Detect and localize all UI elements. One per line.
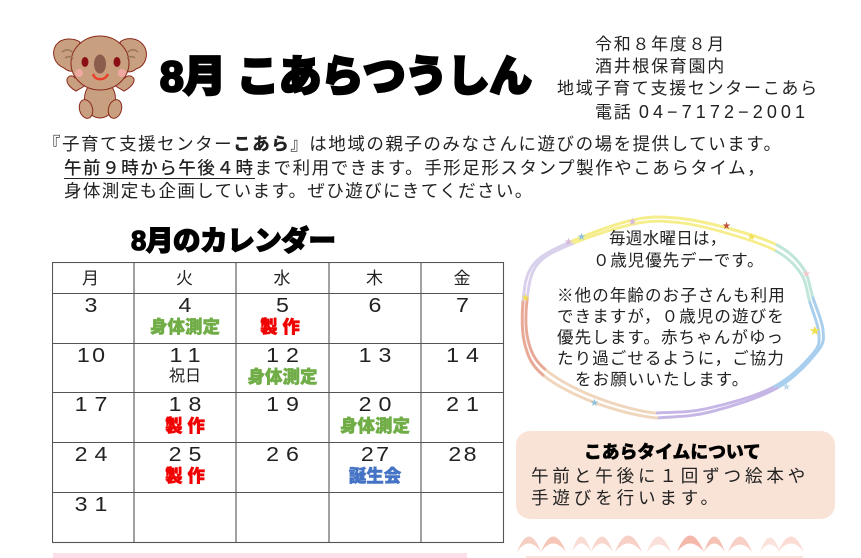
koala time body: 午前と午後に１回ずつ絵本や: [531, 466, 809, 486]
priority day notes: 優先します。赤ちゃんがゆっ: [557, 329, 784, 347]
priority day notes: たり過ごせるように，ご協力: [557, 350, 785, 368]
panel: zero-year-old priority day: ★: [577, 232, 586, 243]
panel: zero-year-old priority day: ★: [809, 324, 821, 339]
calendar dates and events: 20: [359, 394, 398, 416]
calendar dates and events: 7: [456, 295, 471, 317]
weekday headers: 金: [454, 269, 470, 288]
koala time body: 手遊びを行います。: [531, 488, 722, 508]
calendar dates and events: 12: [266, 345, 306, 367]
calendar dates and events: 10: [77, 345, 107, 367]
weekday headers: 木: [366, 269, 383, 288]
intro text: 身体測定も企画しています。ぜひ遊びにきてください。: [64, 181, 534, 201]
organisation details: 酒井根保育園内: [595, 57, 726, 76]
priority day notes: をお願いいたします。: [575, 371, 749, 389]
calendar dates and events: 24: [75, 444, 114, 466]
calendar dates and events: 27: [361, 444, 391, 466]
calendar dates and events: 25: [169, 444, 208, 466]
calendar dates and events: 祝日: [169, 368, 201, 385]
decorative pink band: [53, 553, 467, 558]
calendar dates and events: 製 作: [165, 416, 205, 436]
calendar dates and events: 31: [75, 494, 114, 516]
calendar dates and events: 13: [359, 345, 398, 367]
priority day heading: 毎週水曜日は，: [609, 230, 727, 248]
weekday headers: [82, 269, 470, 288]
calendar dates and events: 28: [448, 444, 479, 466]
calendar dates and events: 18: [169, 394, 208, 416]
organisation details: [557, 35, 819, 122]
calendar dates and events: 17: [75, 394, 114, 416]
weekday headers: 水: [274, 269, 290, 288]
weekday headers: 火: [176, 269, 193, 288]
priority day notes: [557, 286, 786, 389]
panel: zero-year-old priority day: [520, 216, 825, 420]
priority day notes: ※他の年齢のお子さんも利用: [557, 287, 786, 305]
calendar dates and events: 26: [266, 444, 306, 466]
calendar dates and events: 14: [446, 345, 486, 367]
panel: zero-year-old priority day: ★: [628, 217, 637, 228]
organisation details: 令和８年度８月: [595, 35, 726, 54]
panel: zero-year-old priority day: ★: [747, 232, 756, 243]
title: 8月 こあらつうしん: [160, 54, 531, 101]
priority day heading: [593, 230, 764, 270]
panel: zero-year-old priority day: ★: [782, 382, 791, 393]
panel: koala time: [516, 431, 835, 519]
calendar dates and events: 5: [276, 295, 291, 317]
panel: zero-year-old priority day: ★: [802, 269, 811, 280]
calendar dates and events: 21: [446, 394, 486, 416]
calendar dates and events: [75, 295, 486, 516]
weekday headers: 月: [82, 269, 99, 288]
calendar table: [52, 262, 504, 544]
panel: zero-year-old priority day: ★: [590, 398, 599, 409]
organisation details: 地域子育て支援センターこあら: [557, 79, 819, 98]
organisation details: 電話 04−7172−2001: [595, 102, 809, 122]
intro text: [43, 134, 783, 201]
priority day heading: ０歳児優先デーです。: [593, 252, 764, 270]
panel: zero-year-old priority day: ★: [564, 237, 573, 248]
intro text: 午前９時から午後４時まで利用できます。手形足形スタンプ製作やこあらタイム，: [64, 158, 766, 178]
intro text: 『子育て支援センターこあら』は地域の親子のみなさんに遊びの場を提供しています。: [43, 134, 783, 154]
calendar dates and events: 製 作: [165, 466, 205, 486]
calendar dates and events: 身体測定: [248, 367, 318, 387]
calendar dates and events: 19: [266, 394, 306, 416]
priority day notes: できますが，０歳児の遊びを: [557, 308, 785, 326]
calendar dates and events: 6: [369, 295, 384, 317]
calendar dates and events: 誕生会: [349, 466, 401, 486]
calendar dates and events: 3: [85, 295, 100, 317]
calendar dates and events: 身体測定: [340, 416, 410, 436]
koala time body: [531, 466, 809, 508]
calendar dates and events: 身体測定: [150, 317, 220, 337]
panel: zero-year-old priority day: ★: [722, 221, 731, 232]
calendar dates and events: 製 作: [260, 317, 300, 337]
calendar dates and events: 11: [169, 345, 207, 367]
calendar dates and events: 4: [179, 295, 194, 317]
decorative scallop border: [517, 536, 804, 558]
koala time heading: こあらタイムについて: [584, 442, 761, 462]
calendar heading: 8月のカレンダー: [131, 225, 336, 256]
icon: koala mascot: [53, 36, 147, 119]
panel: zero-year-old priority day: ★: [521, 293, 530, 304]
